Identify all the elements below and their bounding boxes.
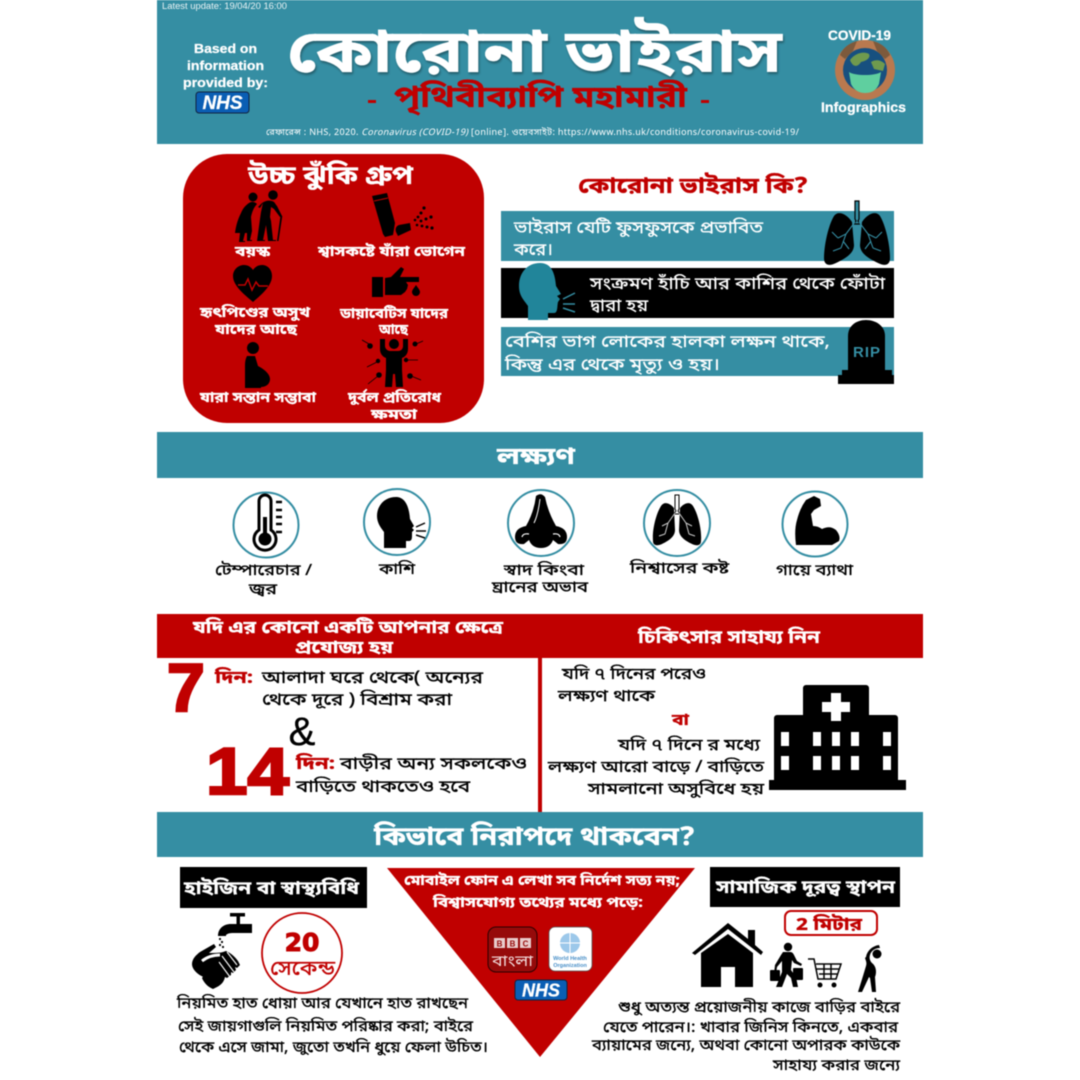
label: [215, 562, 313, 601]
red header bar: isolate and seek help: প্রযোজ্য হয়: [295, 637, 394, 660]
icon: coughing head: [519, 263, 575, 320]
household text: বাড়ীর অন্য সকলকেও: [339, 753, 527, 776]
icon: nose: [515, 494, 567, 548]
panel: medical help: লক্ষ্যণ আরো বাড়ে / বাড়িতে: [547, 757, 765, 779]
panel: isolation days: [167, 650, 527, 808]
fact bar: droplets: সংক্রমণ হাঁচি আর কাশির থেকে ফোঁটা: [589, 273, 886, 296]
icon: tap and washing hands: [192, 913, 252, 989]
logo: BBC Bangla: C: [523, 940, 529, 948]
fact bar: mortality: কিন্তু এর থেকে মৃত্যু ও হয়।: [504, 354, 720, 377]
label: weak immunity: [347, 388, 442, 425]
heading box: [710, 867, 900, 907]
label: গায়ে ব্যাথা: [776, 562, 854, 582]
fact bar: lungs: [501, 201, 894, 265]
icon: globe with mask: [835, 40, 895, 100]
icon: shopping cart: [808, 959, 841, 988]
icon: inhaler: [372, 193, 434, 237]
label: weak immunity: দুর্বল প্রতিরোধ: [347, 388, 442, 408]
label: diabetes: আছে: [378, 321, 409, 340]
label: pregnant: যারা সন্তান সম্ভাবা: [199, 389, 317, 408]
section bar: symptoms: লক্ষ্যণ: [496, 442, 575, 474]
infographics label: Infographics: [821, 99, 906, 115]
logo: World Health Organization: World Health: [553, 956, 588, 962]
label: heart disease: যাদের আছে: [214, 321, 298, 340]
source note: provided by:: [183, 75, 268, 90]
icon: shopper: [770, 943, 803, 987]
badge: 2 metres: [785, 911, 877, 937]
hygiene text: নিয়মিত হাত ধোয়া আর যেখানে হাত রাখছেন: [176, 995, 469, 1015]
hygiene text: [176, 995, 488, 1059]
household text: দিন:: [295, 753, 335, 776]
badge: 20 seconds: সেকেন্ড: [270, 956, 336, 984]
symptom: body ache: [776, 492, 854, 582]
label: ঘ্রানের অভাব: [491, 579, 589, 599]
icon: pregnant woman: [245, 342, 270, 388]
NHS logo: NHS: [202, 93, 243, 114]
source note: [183, 41, 268, 90]
panel: social distancing: [591, 867, 901, 1077]
number: 7: 7: [167, 650, 205, 726]
distancing text: যেতে পারেন।: খাবার জিনিস কিনতে, একবার: [603, 1019, 899, 1039]
badge: 2 metres: 2 মিটার: [796, 914, 863, 937]
source note: Based on: [194, 41, 257, 56]
label: [491, 562, 589, 599]
distancing text: [591, 999, 901, 1077]
label: heart disease: [199, 304, 311, 340]
icon: exercising person: [858, 945, 882, 992]
panel: medical help: সামলানো অসুবিধে হয়: [587, 779, 765, 801]
logo: BBC Bangla: বাংলা: [491, 953, 534, 973]
heading: high risk group: উচ্চ ঝুঁকি গ্রুপ: [247, 159, 414, 195]
isolate text: [214, 667, 484, 712]
icon: house: [692, 923, 763, 987]
panel: hygiene: [176, 867, 488, 1059]
label: breathing problems: শ্বাসকষ্টে যাঁরা ভোগেন: [317, 242, 465, 262]
red header bar: isolate and seek help: [157, 614, 923, 660]
icon: hospital: [769, 685, 906, 790]
badge: 20 seconds: [262, 913, 342, 993]
household text: বাড়িতে থাকতেও হবে: [295, 776, 471, 799]
panel: trusted information triangle: মোবাইল ফোন এ লেখা সব নির্দেশ সত্য নয়;: [404, 871, 680, 891]
distancing text: শুধু অত্যন্ত প্রয়োজনীয় কাজে বাড়ির বাইরে: [618, 999, 901, 1019]
panel: medical help: যদি ৭ দিনের পরেও: [561, 664, 706, 686]
heading: কোরোনা ভাইরাস কি?: [578, 173, 808, 202]
label: নিশ্বাসের কষ্ট: [629, 560, 730, 580]
covid label top: COVID-19: [828, 27, 891, 43]
panel: medical help: বা: [671, 710, 690, 732]
icon: weak immunity figure: [362, 339, 423, 387]
fact bar: mortality: [501, 320, 894, 384]
panel: high risk group: [183, 154, 484, 425]
symptom: cough: [364, 489, 430, 581]
subtitle: পৃথিবীব্যাপি মহামারী: [394, 79, 688, 120]
logo: BBC Bangla: B: [497, 940, 503, 948]
red header bar: isolate and seek help: চিকিৎসার সাহায্য নিন: [637, 627, 821, 651]
icon: head: [377, 497, 426, 548]
red header bar: isolate and seek help: যদি এর কোনো একটি আপনার ক্ষেত্রে: [192, 617, 503, 640]
label: কাশি: [378, 561, 416, 581]
label: টেম্পারেচার /: [215, 562, 313, 582]
label: স্বাদ কিংবা: [503, 562, 585, 582]
panel: what is coronavirus: [501, 173, 894, 384]
ampersand: &: [289, 710, 316, 754]
hygiene text: থেকে এসে জামা, জুতো তখনি ধুয়ে ফেলা উচিত।: [179, 1039, 488, 1059]
fact bar: mortality: বেশির ভাগ লোকের হালকা লক্ষন থাকে,: [505, 331, 830, 354]
icon: RIP gravestone: [838, 320, 894, 384]
number: 14: 14: [206, 734, 289, 808]
icon: heart: [233, 265, 272, 302]
logo: World Health Organization: Organization: [553, 963, 587, 969]
isolate text: দিন:: [214, 667, 253, 690]
isolate text: আলাদা ঘরে থেকে( অন্যের: [261, 667, 484, 690]
hygiene text: সেই জায়গাগুলি নিয়মিত পরিষ্কার করা; বাইরে: [178, 1018, 474, 1038]
icon: thermometer: [254, 495, 282, 550]
symptom: loss of taste or smell: [491, 490, 589, 599]
heading box: হাইজিন বা স্বাস্থ্যবিধি: [183, 878, 360, 902]
icon: flexed arm: [795, 496, 840, 545]
symptom: breathing difficulty: [629, 490, 730, 580]
label: weak immunity: ক্ষমতা: [370, 406, 418, 425]
section bar: symptoms: [157, 432, 923, 478]
panel: medical help: যদি ৭ দিনে র মধ্যে: [617, 735, 761, 757]
section bar: how to stay safe: [157, 812, 923, 857]
label: diabetes: [339, 305, 449, 340]
label: heart disease: হৃৎপিণ্ডের অসুখ: [199, 304, 311, 323]
icon: lungs: [824, 201, 890, 265]
distancing text: ব্যায়ামের জন্যে, অথবা কোনো অপারক কাউকে: [591, 1037, 901, 1057]
icon: lungs: [653, 495, 701, 545]
symptom: fever: [215, 492, 313, 601]
icon: RIP gravestone: RIP: [853, 344, 880, 361]
header banner: [157, 0, 923, 144]
fact bar: droplets: [501, 263, 894, 320]
main title: কোরোনা ভাইরাস: [287, 17, 784, 97]
section bar: how to stay safe: কিভাবে নিরাপদে থাকবেন?: [373, 820, 695, 856]
distancing text: সাহায্য করার জন্যে: [772, 1057, 901, 1077]
icon: elderly couple: [235, 190, 282, 242]
panel: trusted information triangle: বিশ্বাসযোগ্য তথ্যের মধ্যে পড়ে:: [432, 894, 643, 913]
isolate text: থেকে দূরে ) বিশ্রাম করা: [262, 689, 453, 712]
fact bar: lungs: করে।: [513, 239, 553, 262]
panel: medical help: [547, 664, 906, 801]
logo: BBC Bangla: B: [510, 940, 516, 948]
label: diabetes: ডায়াবেটিস যাদের: [339, 305, 449, 324]
panel: medical help: লক্ষ্যণ থাকে: [557, 686, 656, 708]
logo: BBC Bangla: [488, 927, 537, 973]
last update note: Latest update: 19/04/20 16:00: [162, 1, 287, 11]
icon: diabetes finger prick: [372, 267, 420, 297]
household text: [295, 753, 527, 799]
heading box: [180, 867, 367, 908]
reference line: রেফারেন্স : NHS, 2020. Coronavirus (COVID-19) [online]. ওয়েবসাইট: https://www.nhs.uk/conditions/coronavirus-covid-19/: [266, 126, 800, 139]
panel: trusted information triangle: [387, 868, 695, 1057]
logo: NHS: NHS: [522, 980, 560, 1000]
fact bar: lungs: ভাইরাস যেটি ফুসফুসকে প্রভাবিত: [513, 217, 764, 240]
heading box: সামাজিক দূরত্ব স্থাপন: [715, 877, 896, 901]
logo: World Health Organization: [549, 927, 592, 971]
source note: information: [187, 58, 264, 73]
label: elderly: বয়স্ক: [234, 243, 271, 262]
label: জ্বর: [248, 581, 278, 601]
fact bar: droplets: দ্বারা হয়: [589, 295, 648, 318]
badge: 20 seconds: 20: [285, 928, 319, 957]
